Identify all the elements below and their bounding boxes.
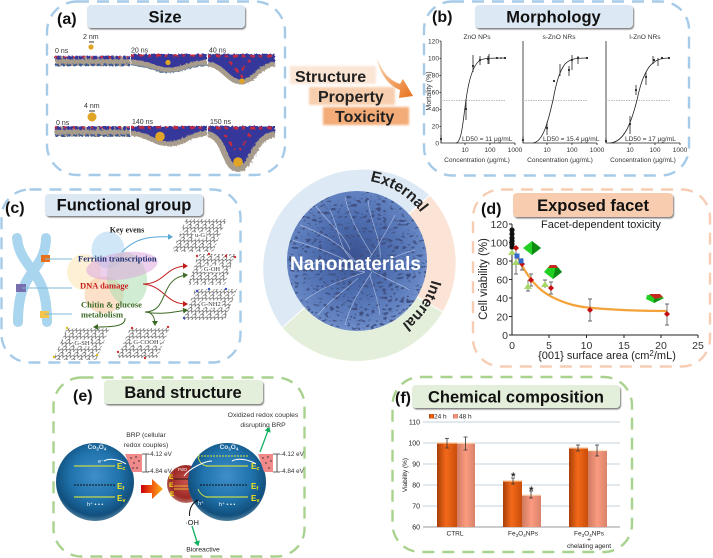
sphere: Co3O4 with PdO: c xyxy=(256,466,259,472)
bar chart: viability: 4 xyxy=(589,533,592,538)
bar chart: viability: 3 xyxy=(582,533,585,538)
chart: s-ZnO NRs: 1000 xyxy=(590,147,605,154)
sphere: pristine Co3O4: v xyxy=(122,498,126,504)
chart: l-ZnO NRs: 100 xyxy=(649,147,661,154)
sphere: Co3O4 with PdO xyxy=(184,443,266,521)
chart: cell viability versus surface area: 40 xyxy=(496,293,508,305)
panel label (e): (e) xyxy=(73,388,93,405)
sphere: Co3O4 with PdO: Co xyxy=(220,444,228,451)
bar chart: viability: NPs xyxy=(592,530,605,538)
label: BRP xyxy=(124,432,168,449)
arrow: hole to hydroxyl xyxy=(189,500,198,516)
sphere: Co3O4 with PdO: f xyxy=(256,486,258,492)
panel label (c): (c) xyxy=(5,200,25,217)
panel label (f): (f) xyxy=(395,390,411,407)
heading: band structure: Band structure xyxy=(124,384,242,402)
panel: band structure xyxy=(54,378,305,556)
gold nanoparticles xyxy=(88,44,245,167)
sphere: PdO particle: PdO xyxy=(178,467,188,472)
redox couples: left xyxy=(125,451,173,475)
bar chart: viability: O xyxy=(584,530,589,538)
chart: ZnO NPs: 60 xyxy=(432,90,439,96)
sheet: u-G: u-G xyxy=(195,232,205,239)
label: BRP: BRP (cellular xyxy=(126,432,166,439)
sphere: pristine Co3O4: e⁻ xyxy=(98,459,104,465)
chart: cell viability versus surface area xyxy=(478,219,704,362)
bar chart: viability: 60 xyxy=(412,524,420,532)
chart: cell viability versus surface area: 2 xyxy=(649,349,654,358)
arrow: to bioreactive xyxy=(192,526,198,545)
chart: s-ZnO NRs xyxy=(522,34,605,164)
heading: exposed facet xyxy=(513,193,673,217)
bar chart: viability: + xyxy=(587,538,591,544)
chart: l-ZnO NRs xyxy=(605,34,688,164)
bar chart: viability: 80 xyxy=(412,482,420,490)
sphere: pristine Co3O4: E xyxy=(117,482,122,491)
bar chart: viability: 100 xyxy=(408,440,420,448)
chromosome icon xyxy=(16,238,72,322)
time and size labels xyxy=(55,34,232,127)
chart: l-ZnO NRs: l-ZnO NRs xyxy=(629,34,661,41)
sphere: Co3O4 with PdO: 4 xyxy=(236,446,239,452)
labels: key events: Ferritin transcription xyxy=(78,254,157,264)
label: bioreactive: Bioreactive xyxy=(186,546,220,554)
bar chart: viability: NPs xyxy=(526,530,539,538)
arrow: block xyxy=(141,479,163,499)
membrane snapshot: 4 nm at 140 ns xyxy=(131,126,207,146)
heading: morphology xyxy=(475,5,633,28)
heading: functional group: Functional group xyxy=(57,196,191,214)
chart: s-ZnO NRs: 100 xyxy=(566,147,578,154)
chart: l-ZnO NRs: Concentration (μg/mL) xyxy=(610,157,676,164)
crystal icon: truncated xyxy=(544,265,562,279)
redox couples: right: -4.84 eV xyxy=(280,468,305,475)
sphere: Co3O4 with PdO: h⁺ • • • xyxy=(219,501,235,508)
redox couples: left: -4.12 eV xyxy=(148,451,173,458)
bar chart: viability: Viability (%) xyxy=(402,458,409,492)
labels: key events: DNA damage xyxy=(80,280,129,290)
sector: exposed facet xyxy=(356,195,456,312)
sheet: G-NH2: G-NH2 xyxy=(201,301,221,308)
bar chart: viability: Fe xyxy=(574,530,582,538)
membrane snapshot: 2 nm at 20 ns xyxy=(131,54,207,72)
labels: key events: metabolism xyxy=(81,310,123,320)
chart: cell viability versus surface area: /mL) xyxy=(654,350,676,362)
panel label (b): (b) xyxy=(432,9,452,26)
sphere: pristine Co3O4: c xyxy=(122,466,125,472)
chart: cell viability versus surface area: 60 xyxy=(496,274,508,286)
sector: internal xyxy=(282,261,443,362)
chart: s-ZnO NRs: Concentration (μg/mL) xyxy=(527,157,593,164)
chart: ZnO NPs: LD50 = 11 μg/mL xyxy=(462,136,513,143)
label: oxidized redox couples xyxy=(228,412,299,429)
heading: chemical composition: Chemical composition xyxy=(428,388,604,406)
label: BRP: redox couples) xyxy=(124,442,168,449)
venn diagram: key events xyxy=(67,232,160,314)
sector: external xyxy=(263,169,430,328)
chart: cell viability versus surface area: 20 xyxy=(496,312,508,324)
heading: band structure xyxy=(104,380,263,404)
chart: cell viability versus surface area: 25 xyxy=(692,340,704,352)
chart: cell viability versus surface area: 5 xyxy=(546,340,552,352)
arrows: key events to sheets xyxy=(94,237,187,327)
membrane snapshot: 4 nm at 0 ns xyxy=(55,128,130,136)
legend xyxy=(429,414,472,420)
sphere: pristine Co3O4: 4 xyxy=(104,446,107,452)
label: property: Property xyxy=(318,89,384,106)
time and size labels: 40 ns xyxy=(209,48,227,54)
sheet: G-SH: G-SH xyxy=(74,340,90,347)
chart: l-ZnO NRs: 10 xyxy=(626,147,634,154)
sphere: Co3O4 with PdO: E xyxy=(251,494,256,503)
panel label (a): (a) xyxy=(57,11,77,28)
chart: ZnO NPs: Concentration (μg/mL) xyxy=(444,157,510,164)
bar chart: viability: O xyxy=(518,530,523,538)
sphere: PdO particle: E xyxy=(170,491,175,498)
chart: ZnO NPs: 120 xyxy=(428,38,439,46)
panel: size xyxy=(47,2,285,175)
chart: ZnO NPs: 40 xyxy=(432,106,439,114)
sheet: G-NH2 xyxy=(183,288,237,320)
graphene sheets xyxy=(53,219,237,360)
sheet: G-OH: G-OH xyxy=(204,266,220,273)
sphere: pristine Co3O4: f xyxy=(122,486,124,492)
panel: chemical composition xyxy=(392,377,632,552)
label: external: External xyxy=(371,170,429,212)
label: nanomaterials: Nanomaterials xyxy=(290,254,421,275)
bar chart: viability: 4 xyxy=(523,533,526,538)
sphere: Co3O4 with PdO: 3 xyxy=(228,446,231,452)
sphere: pristine Co3O4: O xyxy=(99,444,104,451)
time and size labels: 140 ns xyxy=(132,119,154,126)
chart: cell viability versus surface area: 80 xyxy=(496,256,508,268)
label: oxidized redox couples: Oxidized redox couples xyxy=(228,412,299,419)
bar chart: viability: * xyxy=(529,485,534,497)
bar chart: viability: 110 xyxy=(409,420,420,426)
central diagram: nanomaterials xyxy=(263,170,456,361)
nanomaterial sphere xyxy=(287,191,427,331)
crystal icon: octahedral xyxy=(523,241,541,255)
chart: ZnO NPs: 20 xyxy=(432,124,439,130)
label: structure: Structure xyxy=(295,69,366,86)
bar chart: viability xyxy=(402,420,620,550)
sphere: Co3O4 with PdO: O xyxy=(231,444,236,451)
bar chart: viability: 3 xyxy=(516,533,519,538)
bar chart: viability: CTRL xyxy=(447,530,464,538)
sphere: Co3O4 with PdO: v xyxy=(256,498,260,504)
labels: key events: Chitin & glucose xyxy=(81,300,142,310)
legend: 48 h xyxy=(459,414,472,420)
chart: ZnO NPs: 0 xyxy=(435,140,439,148)
membrane snapshot: 2 nm at 40 ns xyxy=(208,54,275,84)
bar chart: viability: chelating agent xyxy=(567,543,611,550)
sphere: pristine Co3O4: E xyxy=(117,494,122,503)
chart: cell viability versus surface area: {001} surface area (cm xyxy=(538,350,649,362)
chart: ZnO NPs xyxy=(426,34,523,164)
bar chart: viability: 90 xyxy=(412,462,420,468)
sphere: PdO particle xyxy=(167,465,205,503)
heading: size: Size xyxy=(148,8,182,26)
arrow: to morphology xyxy=(377,58,413,98)
sphere: pristine Co3O4: 3 xyxy=(96,446,99,452)
time and size labels: 0 ns xyxy=(55,48,69,55)
chart: cell viability versus surface area: 0 xyxy=(509,340,515,352)
label: hydroxyl radical: ·OH xyxy=(185,518,199,527)
membrane snapshot: 2 nm at 0 ns xyxy=(55,57,130,65)
chart: cell viability versus surface area: 0 xyxy=(502,330,508,342)
chart: ZnO NPs: 100 xyxy=(428,56,439,62)
chart: s-ZnO NRs: LD50 = 15.4 μg/mL xyxy=(543,136,600,143)
panel label (d): (d) xyxy=(481,201,501,218)
chart: ZnO NPs: 10 xyxy=(461,147,469,154)
time and size labels: 0 ns xyxy=(56,120,70,127)
chart: ZnO NPs: ZnO NPs xyxy=(463,34,491,41)
labels: key events xyxy=(78,226,157,320)
panel: functional group xyxy=(2,190,240,362)
panel: exposed facet xyxy=(473,190,710,366)
heading: size xyxy=(87,5,245,28)
sheet: G-OH xyxy=(188,253,236,285)
time and size labels: 4 nm xyxy=(84,103,100,110)
chart: ZnO NPs: 80 xyxy=(432,72,439,80)
sphere: pristine Co3O4: Co xyxy=(88,444,96,451)
label: internal: Internal xyxy=(402,280,442,332)
sphere: pristine Co3O4: h⁺ • • • xyxy=(87,501,103,508)
heading: exposed facet: Exposed facet xyxy=(537,197,649,215)
sheet: u-G xyxy=(172,219,227,252)
sphere: pristine Co3O4 xyxy=(56,443,134,521)
chart: s-ZnO NRs: s-ZnO NRs xyxy=(543,34,576,41)
sphere: Co3O4 with PdO: E xyxy=(251,462,256,471)
heading: chemical composition xyxy=(412,385,620,408)
chart: cell viability versus surface area: Cell viability (%) xyxy=(478,238,490,320)
time and size labels: 20 ns xyxy=(131,48,149,54)
chart: ZnO NPs: Mortality (%) xyxy=(426,71,433,111)
sheet: G-COOH: G-COOH xyxy=(133,339,159,346)
label: oxidized redox couples: disrupting BRP xyxy=(240,422,286,429)
chart: l-ZnO NRs: 1000 xyxy=(673,147,688,154)
chart: s-ZnO NRs: 10 xyxy=(543,147,551,154)
panel: morphology xyxy=(424,2,689,176)
heading: morphology: Morphology xyxy=(506,8,602,26)
structure property toxicity stack xyxy=(290,58,413,126)
redox couples: left: -4.84 eV xyxy=(148,468,173,475)
sheet: G-COOH xyxy=(117,326,170,359)
time and size labels: 150 ns xyxy=(210,119,232,126)
chart: cell viability versus surface area: 10 xyxy=(581,340,592,352)
legend: 24 h xyxy=(434,414,447,420)
bar chart: viability: 70 xyxy=(412,504,420,510)
bar chart: viability: * xyxy=(511,471,516,483)
membrane snapshot: 4 nm at 150 ns xyxy=(208,126,275,170)
chart: ZnO NPs: 1000 xyxy=(508,147,523,154)
chart: l-ZnO NRs: LD50 = 17 μg/mL xyxy=(625,136,676,143)
chart: cell viability versus surface area: 100 xyxy=(490,238,508,250)
redox couples: right: -4.12 eV xyxy=(280,451,305,458)
heading: functional group xyxy=(45,194,203,216)
chart: cell viability versus surface area: 120 xyxy=(490,219,508,231)
sphere: pristine Co3O4: E xyxy=(117,462,122,471)
sphere: PdO particle: E xyxy=(169,482,174,489)
chart: cell viability versus surface area: 15 xyxy=(618,340,630,352)
labels: key events: Key evens xyxy=(110,226,144,234)
redox couples: right xyxy=(258,451,305,475)
crystal icon: platelet xyxy=(646,294,664,303)
chart: cell viability versus surface area: 20 xyxy=(655,340,667,352)
chart: ZnO NPs: 100 xyxy=(484,147,496,154)
bar chart: viability: Fe xyxy=(508,530,516,538)
chart title: Facet-dependent toxicity xyxy=(541,219,661,231)
sphere: Co3O4 with PdO: h⁺ xyxy=(198,500,204,507)
label: toxicity: Toxicity xyxy=(335,109,394,126)
sheet: G-SH xyxy=(53,327,110,360)
arrow: to oxidized redox couples xyxy=(260,428,269,452)
sphere: PdO particle: E xyxy=(169,474,174,481)
sphere: Co3O4 with PdO: E xyxy=(251,482,256,491)
time and size labels: 2 nm xyxy=(83,34,99,41)
